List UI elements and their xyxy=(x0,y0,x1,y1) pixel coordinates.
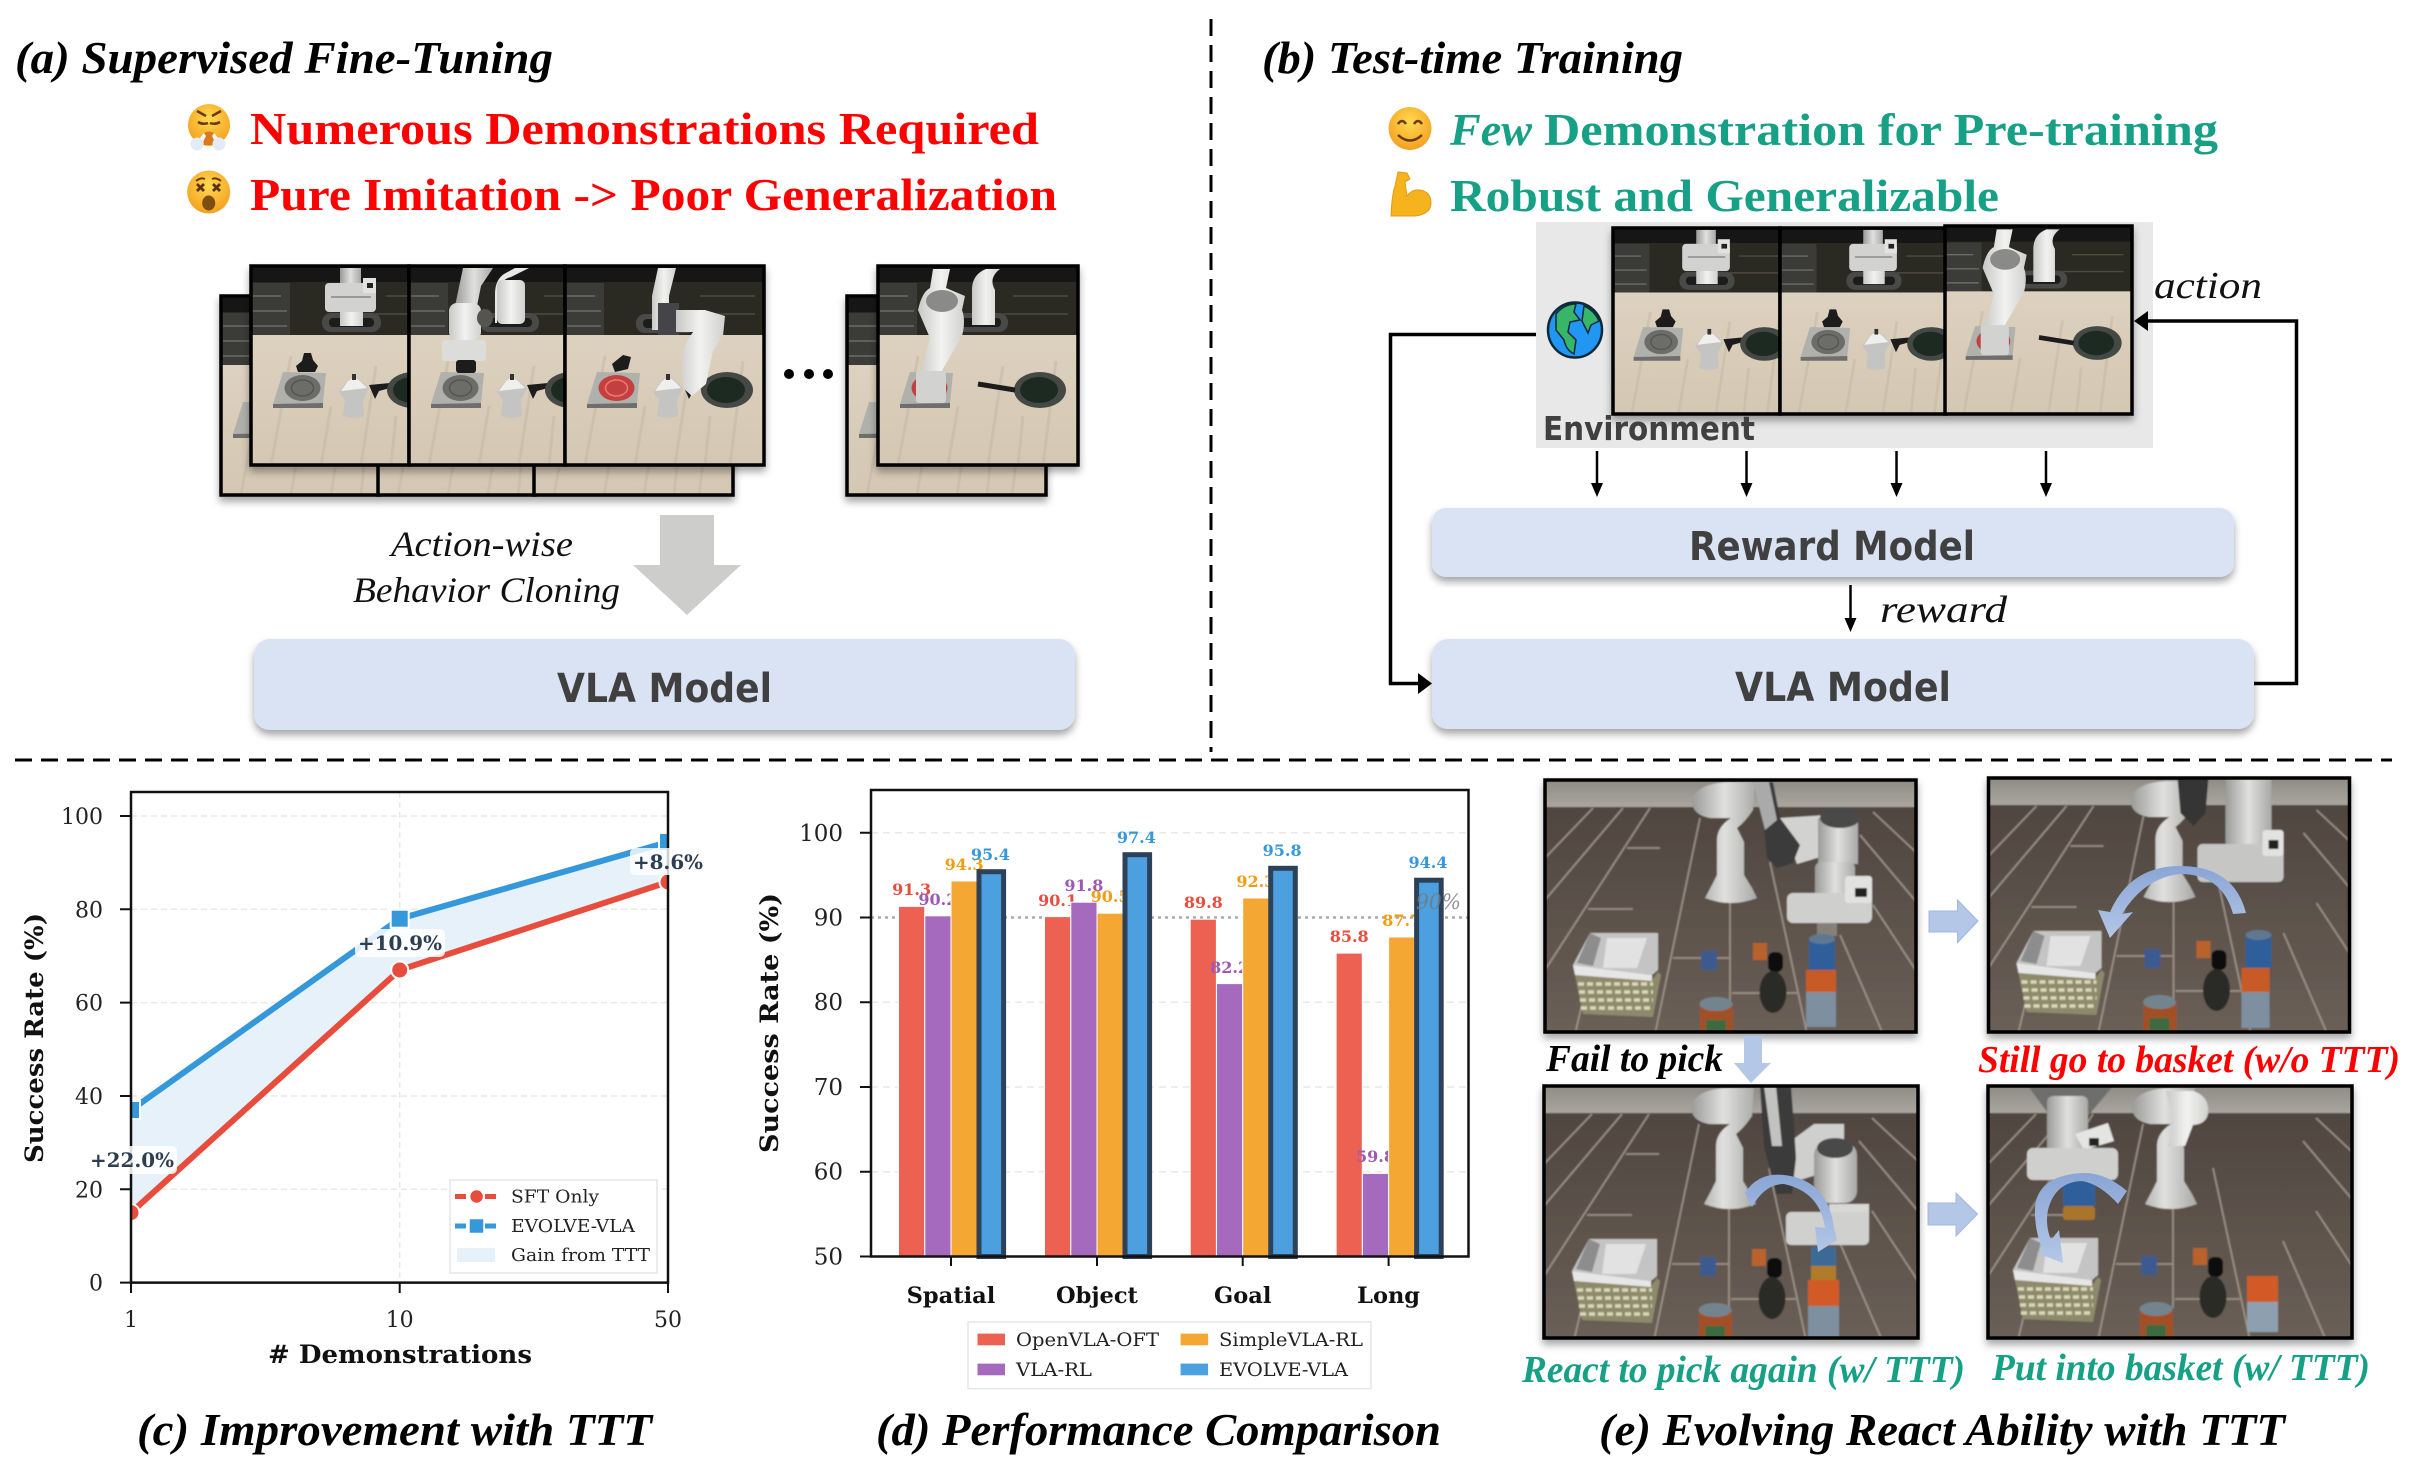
label: environment: Environment xyxy=(1543,409,1755,448)
caption: put into basket: Put into basket (w/ TTT) xyxy=(1991,1347,2370,1389)
frame final xyxy=(875,268,1081,473)
panel: supervised fine-tuning xyxy=(15,32,1078,730)
bars: OpenVLA-OFT: 91.3 xyxy=(892,880,931,899)
bars: VLA-RL: 90.2 xyxy=(918,890,957,909)
frame 1 xyxy=(248,268,410,473)
legend: OpenVLA-OFT xyxy=(1016,1330,1160,1351)
VLA model box xyxy=(1432,639,2254,729)
red heading line 2: Pure Imitation -> Poor Generalization xyxy=(250,169,1057,220)
gain annotations xyxy=(88,848,705,1174)
bars: SimpleVLA-RL: 92.3 xyxy=(1236,872,1275,891)
line chart series xyxy=(132,834,667,1220)
gain annotations: +10.9% xyxy=(358,931,442,955)
arrows: frames to reward model xyxy=(1591,451,2052,497)
bars: EVOLVE-VLA xyxy=(971,828,1447,1256)
y axis label: Success Rate (%) xyxy=(20,913,49,1163)
panel: test-time training xyxy=(1262,32,2296,729)
bars: VLA-RL: 59.8 xyxy=(1356,1147,1395,1166)
x axis tick labels xyxy=(124,1308,682,1333)
x axis label: # Demonstrations xyxy=(268,1340,532,1369)
legend: SimpleVLA-RL xyxy=(1219,1330,1363,1351)
arrow: top photo to right xyxy=(1929,900,1978,943)
x axis categories: Spatial xyxy=(907,1283,995,1309)
x axis categories: Long xyxy=(1357,1283,1420,1309)
curved arrow: put into basket xyxy=(2035,1173,2127,1263)
x axis categories: Goal xyxy=(1214,1283,1271,1309)
caption: fail to pick: Fail to pick xyxy=(1545,1038,1723,1080)
label: action-wise behavior cloning: Action-wise xyxy=(389,524,573,564)
bars: EVOLVE-VLA: 97.4 xyxy=(1117,828,1156,847)
bars: EVOLVE-VLA: 95.8 xyxy=(1263,841,1302,860)
ellipsis dots xyxy=(784,369,833,379)
90 percent reference line xyxy=(871,916,1468,919)
y axis ticks: 70 xyxy=(814,1075,843,1101)
gain annotations: +22.0% xyxy=(90,1148,174,1172)
caption: react to pick again: React to pick again (w/ TTT) xyxy=(1521,1349,1965,1391)
bars: SimpleVLA-RL: 90.5 xyxy=(1091,887,1130,906)
title: panel a: (a) Supervised Fine-Tuning xyxy=(15,32,553,83)
bars: EVOLVE-VLA: 94.4 xyxy=(1409,853,1447,872)
legend xyxy=(450,1180,657,1273)
y axis ticks: 100 xyxy=(799,821,843,847)
green heading line 1: Few xyxy=(1449,104,1532,155)
label: reward: reward xyxy=(1880,589,2008,631)
legend: Gain from TTT xyxy=(511,1245,650,1266)
y axis ticks: 60 xyxy=(814,1160,843,1186)
icon: smiling face emoji xyxy=(1388,107,1432,150)
icon: globe xyxy=(1548,302,1602,358)
curved arrow: react to pick xyxy=(1745,1175,1837,1252)
bars: SimpleVLA-RL: 94.3 xyxy=(945,855,984,874)
x axis categories xyxy=(907,1283,1420,1309)
VLA model box: VLA Model xyxy=(557,666,772,712)
photo: put into basket xyxy=(1988,1086,2362,1340)
y axis ticks: 20 xyxy=(75,1178,103,1203)
panel: performance bar chart xyxy=(755,790,1468,1455)
arrow: behavior cloning xyxy=(633,515,741,615)
bars: OpenVLA-OFT xyxy=(892,880,1369,1256)
y axis ticks: 40 xyxy=(75,1085,103,1110)
gridlines xyxy=(871,833,1468,1172)
y axis ticks xyxy=(799,821,1389,1270)
legend xyxy=(968,1322,1371,1389)
arrow: bottom photo to right xyxy=(1928,1193,1978,1236)
caption d: (d) Performance Comparison xyxy=(876,1404,1441,1455)
x axis tick labels: 1 xyxy=(124,1308,138,1333)
y axis ticks: 0 xyxy=(89,1272,103,1297)
curved arrow: to basket xyxy=(2098,866,2246,938)
label: action-wise behavior cloning: Behavior Cloning xyxy=(353,570,620,610)
y axis label: Success Rate (%) xyxy=(755,893,784,1153)
label: action: action xyxy=(2154,265,2262,307)
red heading line 1: Numerous Demonstrations Required xyxy=(250,103,1039,154)
photo: react to pick xyxy=(1544,1086,1918,1340)
caption e: (e) Evolving React Ability with TTT xyxy=(1599,1404,2287,1455)
bars: VLA-RL xyxy=(918,876,1395,1256)
environment panel xyxy=(1536,222,2153,448)
arrow: reward xyxy=(1844,585,1856,632)
arrow: environment to VLA xyxy=(1390,334,1536,694)
bars: SimpleVLA-RL xyxy=(945,855,1421,1256)
90 percent label: 90% xyxy=(1416,890,1461,914)
gain annotations: +8.6% xyxy=(633,850,703,874)
axes frame xyxy=(871,790,1468,1256)
frame 2 xyxy=(408,268,566,473)
legend: SFT Only xyxy=(511,1186,600,1208)
VLA model box xyxy=(254,639,1075,730)
y axis ticks: 80 xyxy=(75,898,103,923)
photo: goes to basket without TTT xyxy=(1988,778,2362,1032)
x axis tick labels: 10 xyxy=(386,1308,414,1333)
label: action-wise behavior cloning xyxy=(353,524,620,610)
green heading line 2: Robust and Generalizable xyxy=(1450,170,1999,221)
demonstration frames stack xyxy=(221,266,1078,495)
arrow: action loop xyxy=(2134,311,2296,684)
bars: VLA-RL: 91.8 xyxy=(1064,876,1103,895)
panel divider horizontal xyxy=(15,758,2392,762)
y axis ticks: 80 xyxy=(814,990,843,1016)
bars: OpenVLA-OFT: 90.1 xyxy=(1038,891,1077,910)
x axis tick labels: 50 xyxy=(654,1308,682,1333)
y axis ticks xyxy=(61,805,668,1297)
axes frame xyxy=(131,792,668,1283)
bars: VLA-RL: 82.2 xyxy=(1210,958,1249,977)
panel: evolving react ability xyxy=(1521,778,2400,1455)
icon: dizzy face emoji xyxy=(187,170,230,214)
green heading line 1: Demonstration for Pre-training xyxy=(1544,104,2218,155)
title: panel b: (b) Test-time Training xyxy=(1262,32,1683,83)
icon: huffing face emoji xyxy=(188,104,230,150)
frame 3 xyxy=(564,268,767,473)
y axis ticks: 90 xyxy=(814,906,843,932)
y axis ticks: 100 xyxy=(61,805,103,830)
legend: EVOLVE-VLA xyxy=(1219,1360,1349,1381)
reward model box: Reward Model xyxy=(1689,524,1975,570)
icon: flexed biceps emoji xyxy=(1391,172,1431,216)
legend: VLA-RL xyxy=(1015,1360,1092,1381)
panel: improvement line chart xyxy=(20,792,705,1455)
bars: EVOLVE-VLA: 95.4 xyxy=(971,845,1010,864)
bars: SimpleVLA-RL: 87.7 xyxy=(1382,911,1421,930)
panel divider vertical xyxy=(1210,19,1212,752)
y axis ticks: 50 xyxy=(814,1244,843,1270)
bars: OpenVLA-OFT: 85.8 xyxy=(1330,927,1369,946)
y axis ticks: 60 xyxy=(75,992,103,1017)
bars: OpenVLA-OFT: 89.8 xyxy=(1184,893,1223,912)
reward model box xyxy=(1432,508,2234,577)
gridlines and fill xyxy=(131,792,668,1282)
caption: still go to basket: Still go to basket (w/o TTT) xyxy=(1978,1039,2400,1081)
arrow: down between left photos xyxy=(1734,1036,1771,1083)
x axis categories: Object xyxy=(1056,1283,1139,1309)
caption c: (c) Improvement with TTT xyxy=(137,1404,654,1455)
VLA model box: VLA Model xyxy=(1735,665,1951,711)
photo: failed pick xyxy=(1545,780,1919,1034)
legend: EVOLVE-VLA xyxy=(511,1216,636,1237)
